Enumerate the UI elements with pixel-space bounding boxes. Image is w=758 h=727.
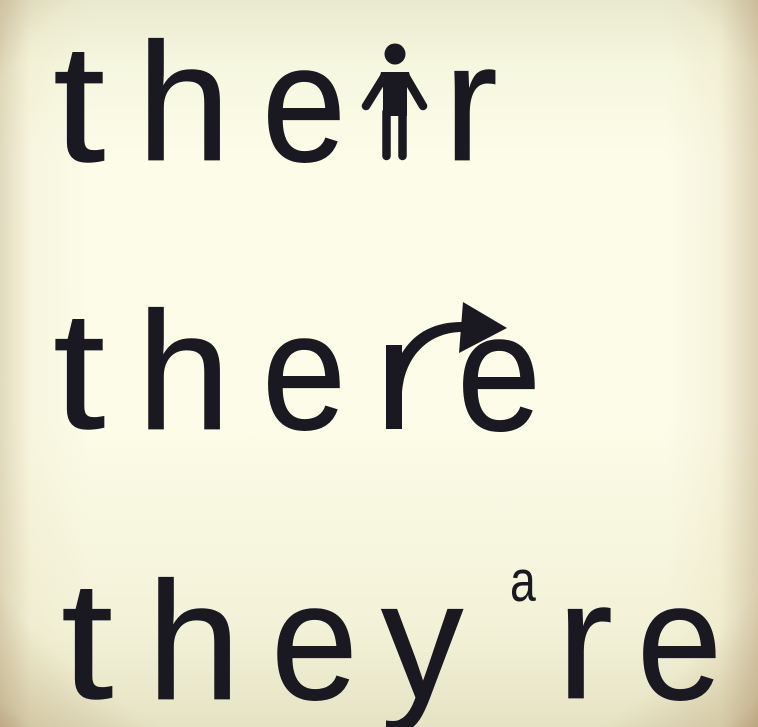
word: they're (61, 546, 722, 727)
word: there (53, 276, 541, 466)
word: there: t (53, 276, 105, 464)
word: there: e (262, 277, 346, 465)
word: there: h (137, 277, 230, 465)
word: their: r (444, 8, 498, 196)
word: their: t (53, 9, 105, 197)
word: there: e (457, 278, 541, 466)
word: their (53, 8, 498, 197)
icon: person standing in for the letter i (366, 44, 423, 156)
small letter a above the apostrophe position: a (510, 549, 537, 614)
word: their: e (262, 9, 346, 197)
icon: letter r with arrow arm (386, 302, 507, 429)
word: their: h (137, 8, 230, 196)
